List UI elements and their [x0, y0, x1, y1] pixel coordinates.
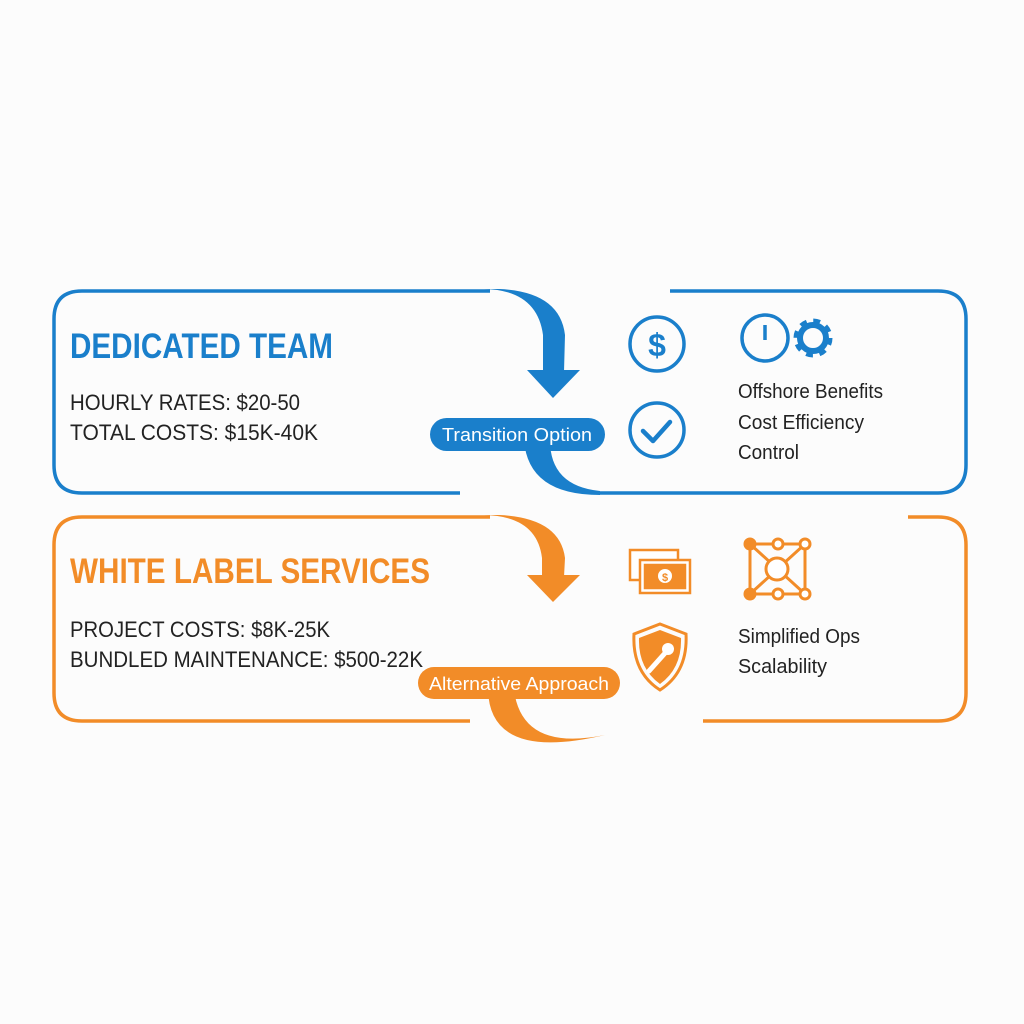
text block: benefits: Cost Efficiency: [738, 412, 864, 434]
arrow: blue down: [484, 289, 580, 398]
callout: transition option: Transition Option: [442, 425, 592, 445]
text block: benefits: Offshore Benefits: [738, 381, 883, 403]
text block: dedicated costs: TOTAL COSTS: $15K-40K: [70, 420, 318, 445]
arrow: orange down: [484, 515, 580, 602]
icon: money: [630, 550, 690, 593]
panel: white label: [54, 515, 580, 721]
text block: white label benefits: Simplified Ops: [738, 626, 860, 648]
text block: dedicated costs: HOURLY RATES: $20-50: [70, 390, 300, 415]
icon: dollar: $: [648, 327, 666, 363]
text block: white label costs: PROJECT COSTS: $8K-25K: [70, 617, 330, 642]
text block: white label benefits: Scalability: [738, 656, 827, 678]
icon: dollar: [630, 317, 684, 371]
icon: clock and gear: [742, 315, 828, 361]
text block: benefits: Control: [738, 442, 799, 464]
icon: shield wrench: [634, 624, 686, 690]
text block: benefits: [738, 381, 883, 464]
callout: alternative approach: Alternative Approach: [429, 674, 609, 694]
callout: alternative approach: [418, 667, 620, 699]
icon: check: [630, 403, 684, 457]
heading: white label services: WHITE LABEL SERVICES: [70, 552, 430, 591]
callout: transition option: [430, 418, 605, 451]
text block: white label costs: [70, 617, 423, 672]
panel: white label benefits: [418, 517, 966, 742]
text block: white label benefits: [738, 626, 860, 678]
heading: dedicated team: DEDICATED TEAM: [70, 327, 333, 366]
icon: money: $: [662, 572, 668, 584]
panel: dedicated benefits: [430, 291, 966, 495]
text block: white label costs: BUNDLED MAINTENANCE: $500-22K: [70, 647, 423, 672]
icon: network: [745, 539, 810, 599]
panel: dedicated team: [54, 289, 580, 493]
text block: dedicated costs: [70, 390, 318, 445]
